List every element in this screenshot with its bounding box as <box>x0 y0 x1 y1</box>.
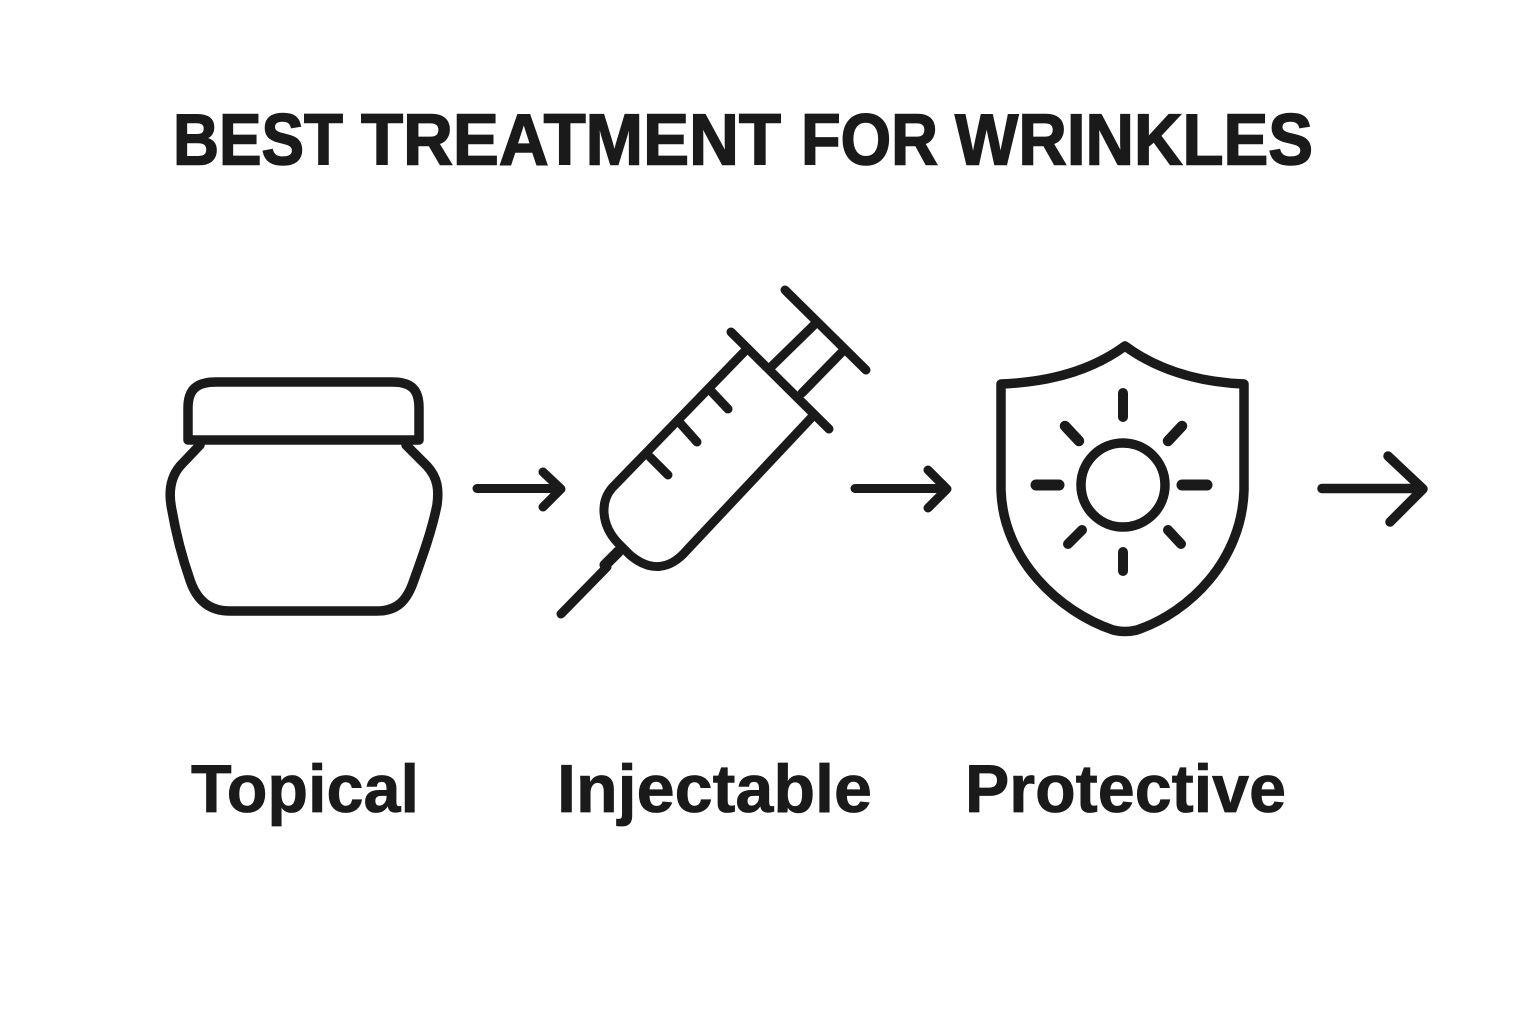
label: protective: Protective <box>965 751 1286 827</box>
icon: syringe <box>561 290 866 614</box>
label: topical: Topical <box>191 751 419 827</box>
title: BEST <box>173 100 343 180</box>
icon: sun protection shield <box>1001 346 1244 632</box>
title: TREATMENT <box>361 100 781 180</box>
title: WRINKLES <box>955 100 1313 180</box>
title: FOR <box>801 100 938 180</box>
arrow: topical to injectable <box>477 472 561 507</box>
label: injectable: Injectable <box>557 751 872 827</box>
arrow: injectable to protective <box>855 470 947 508</box>
icon: cream jar <box>170 382 438 611</box>
title <box>173 100 1313 180</box>
arrow: after protective <box>1322 456 1423 522</box>
